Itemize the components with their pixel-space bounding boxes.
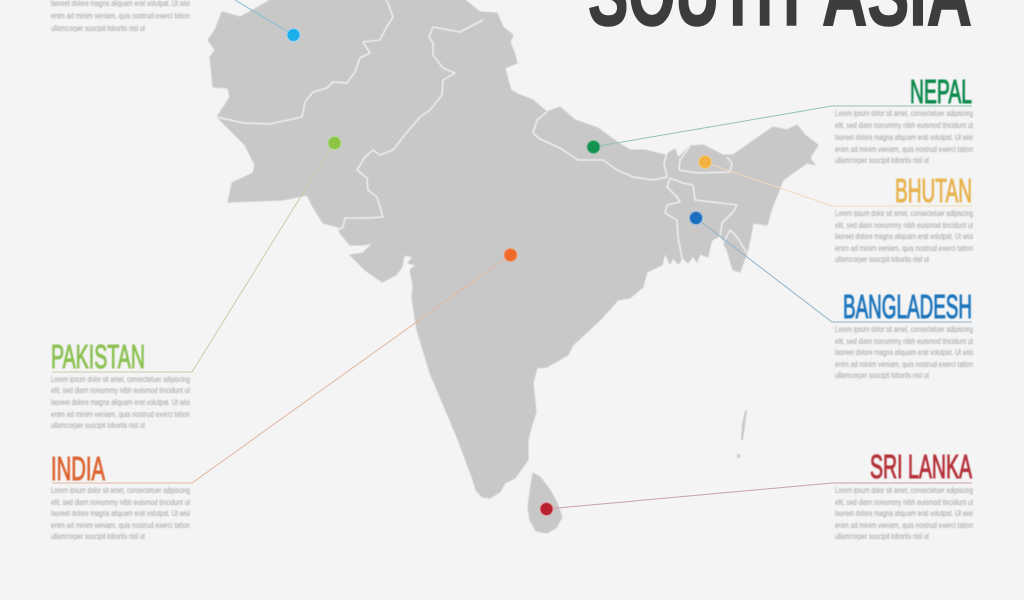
leader: Afghanistan <box>235 0 293 35</box>
body text: Pakistan: enim ad minim veniam, quis nostrud exerci tation <box>51 409 190 419</box>
body text: Bhutan: ullamcorper suscipit lobortis nisl ut <box>835 254 929 264</box>
marker: Afghanistan <box>287 28 300 42</box>
panel: Pakistan <box>51 338 190 430</box>
panel: Afghanistan text (cropped) <box>51 0 190 33</box>
body text: Bangladesh: enim ad minim veniam, quis nostrud exerci tation <box>835 359 973 369</box>
body text: Sri Lanka: laoreet dolore magna aliquam erat volutpat. Ut wisi <box>835 508 973 518</box>
body text: Nepal: laoreet dolore magna aliquam erat volutpat. Ut wisi <box>835 132 973 142</box>
panel: Sri Lanka <box>835 448 973 541</box>
body text: Bangladesh: ullamcorper suscipit lobortis nisl ut <box>835 370 929 380</box>
leader: Bhutan <box>704 162 972 206</box>
body text: Bhutan: elit, sed diam nonummy nibh euismod tincidunt ut <box>835 220 973 230</box>
body text: India <box>51 485 190 541</box>
country borders <box>217 0 747 263</box>
body text: Bhutan: laoreet dolore magna aliquam erat volutpat. Ut wisi <box>835 231 973 241</box>
panel: Bhutan <box>835 172 973 264</box>
body text: India: laoreet dolore magna aliquam erat volutpat. Ut wisi <box>51 508 190 518</box>
Sri Lanka landmass <box>528 473 562 533</box>
body text: Pakistan: laoreet dolore magna aliquam erat volutpat. Ut wisi <box>51 397 190 407</box>
panel: Nepal <box>835 73 973 165</box>
panel: Bangladesh <box>835 288 973 380</box>
body text: Sri Lanka: enim ad minim veniam, quis nostrud exerci tation <box>835 520 973 530</box>
body text: Pakistan <box>51 374 190 430</box>
panel: Afghanistan text (cropped): enim ad minim veniam, quis nostrud exerci tation <box>51 10 190 20</box>
body text: Bangladesh: elit, sed diam nonummy nibh euismod tincidunt ut <box>835 336 973 346</box>
marker: Nepal <box>587 140 600 154</box>
body text: Bhutan <box>835 208 973 264</box>
body text: Bhutan: enim ad minim veniam, quis nostrud exerci tation <box>835 243 973 253</box>
leader: Pakistan <box>52 143 334 372</box>
body text: India: ullamcorper suscipit lobortis nisl ut <box>51 531 145 541</box>
body text: Pakistan: ullamcorper suscipit lobortis nisl ut <box>51 420 145 430</box>
heading: India: INDIA <box>51 450 105 487</box>
body text: India: elit, sed diam nonummy nibh euismod tincidunt ut <box>51 497 190 507</box>
heading: Nepal: NEPAL <box>910 73 972 110</box>
leader: Sri Lanka <box>546 483 972 509</box>
heading: Pakistan: PAKISTAN <box>51 338 145 375</box>
marker: Bhutan <box>698 156 712 168</box>
body text: Bangladesh: laoreet dolore magna aliquam erat volutpat. Ut wisi <box>835 347 973 357</box>
body text: Nepal <box>835 108 973 165</box>
marker: India <box>504 248 517 262</box>
leader lines <box>52 0 972 509</box>
body text: India: enim ad minim veniam, quis nostrud exerci tation <box>51 520 190 530</box>
marker: Bangladesh <box>690 212 702 224</box>
leader: Nepal <box>593 106 972 147</box>
Andaman islands <box>737 410 747 458</box>
body text: Bangladesh <box>835 324 973 380</box>
body text: Pakistan: elit, sed diam nonummy nibh euismod tincidunt ut <box>51 385 190 395</box>
body text: Nepal: elit, sed diam nonummy nibh euismod tincidunt ut <box>835 120 973 130</box>
map of South Asia <box>208 0 818 533</box>
body text: Nepal: ullamcorper suscipit lobortis nisl ut <box>835 155 929 165</box>
body text: Sri Lanka: ullamcorper suscipit lobortis nisl ut <box>835 531 929 541</box>
body text: Nepal: enim ad minim veniam, quis nostrud exerci tation <box>835 144 973 154</box>
mainland landmass <box>208 0 818 498</box>
body text: Pakistan: Lorem ipsum dolor sit amet, consectetuer adipiscing <box>51 374 190 384</box>
location markers <box>287 28 712 516</box>
leader: India <box>52 255 510 483</box>
body text: Sri Lanka <box>835 485 973 541</box>
marker: Sri Lanka <box>540 502 553 516</box>
body text: India: Lorem ipsum dolor sit amet, consectetuer adipiscing <box>51 485 190 495</box>
marker: Pakistan <box>328 136 341 150</box>
leader: Bangladesh <box>696 218 972 322</box>
body text: Sri Lanka: elit, sed diam nonummy nibh euismod tincidunt ut <box>835 497 973 507</box>
panel: Afghanistan text (cropped): ullamcorper suscipit lobortis nisl ut <box>51 23 145 33</box>
panel: India <box>51 450 190 541</box>
